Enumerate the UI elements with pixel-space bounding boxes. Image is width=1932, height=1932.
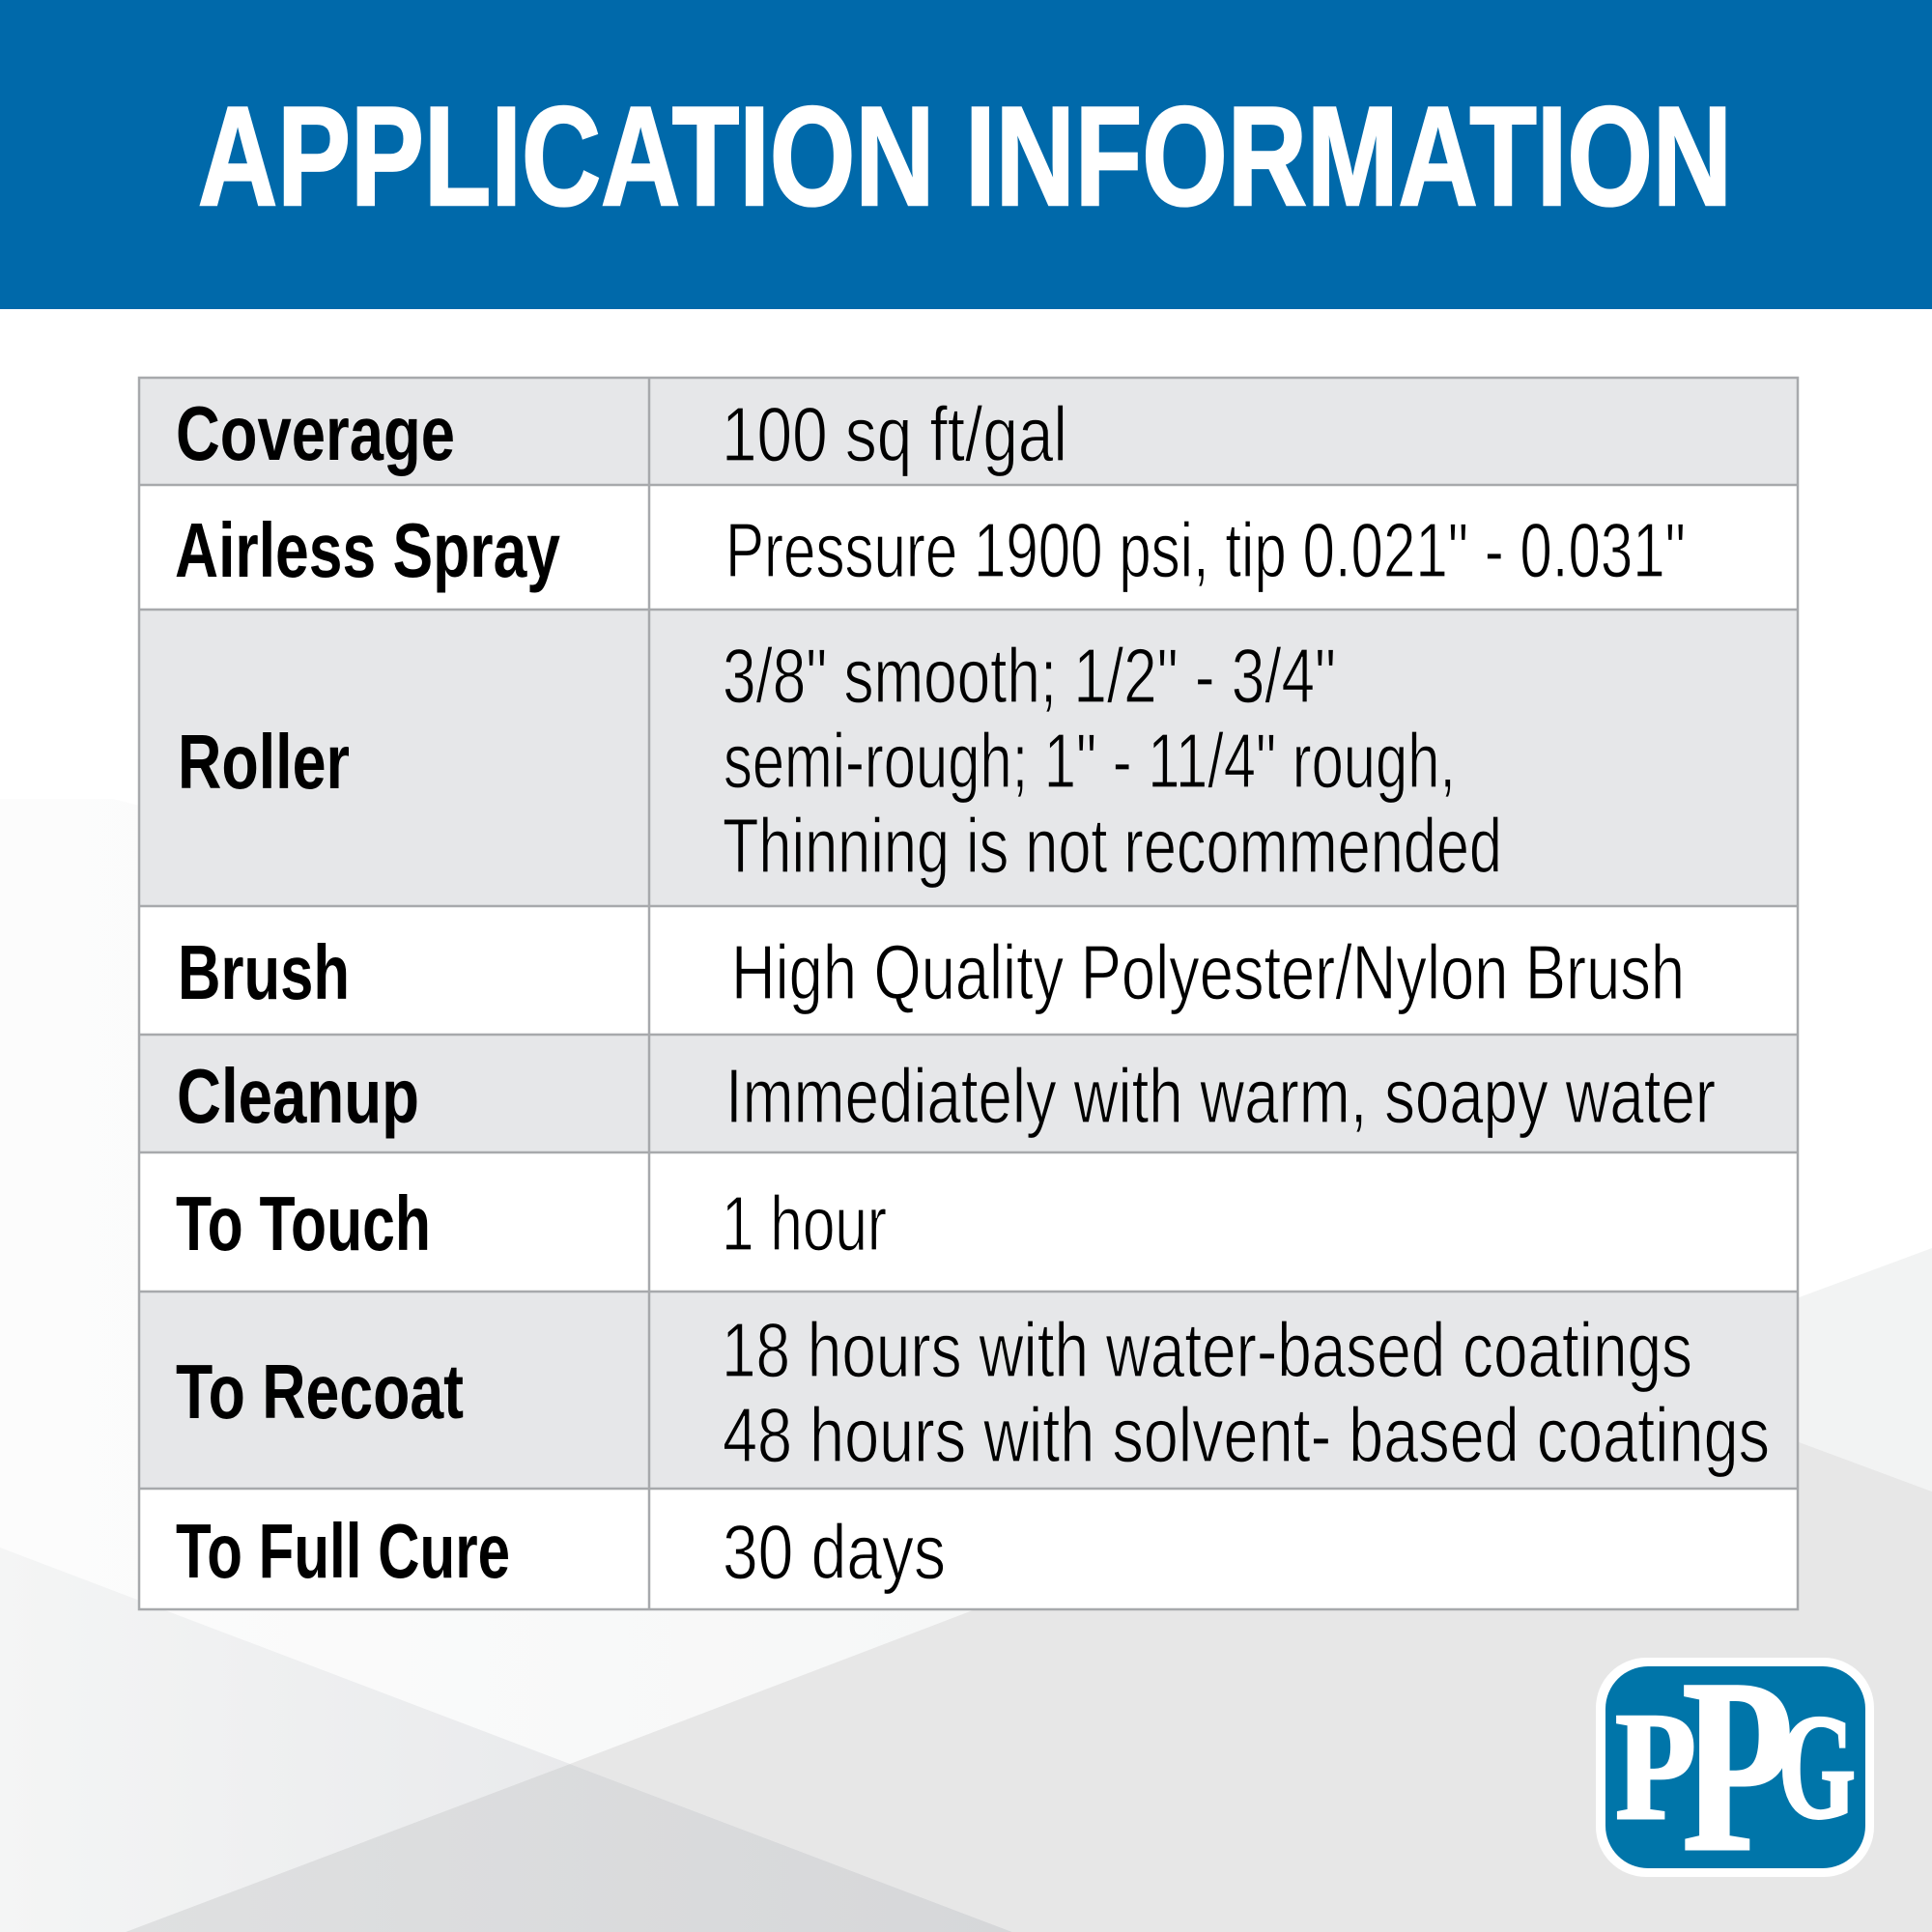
label: to full cure: To Full Cure — [176, 1508, 510, 1594]
value: to touch: 1 hour — [722, 1180, 887, 1266]
table — [139, 378, 1798, 1609]
row: to recoat — [139, 1292, 1798, 1489]
label: cleanup: Cleanup — [177, 1053, 419, 1139]
row: to full cure — [139, 1489, 1798, 1609]
value: roller: semi-rough; 1" - 11/4" rough, — [724, 718, 1456, 804]
logo: PPG: G — [1778, 1684, 1856, 1850]
value: roller: 3/8" smooth; 1/2" - 3/4" — [723, 633, 1336, 719]
row: roller — [139, 610, 1798, 906]
value: to full cure: 30 days — [723, 1509, 946, 1595]
logo: PPG: P — [1682, 1628, 1794, 1903]
label: coverage: Coverage — [176, 390, 455, 476]
value: brush: High Quality Polyester/Nylon Brush — [731, 929, 1685, 1015]
label: to recoat: To Recoat — [176, 1349, 464, 1435]
table grid lines — [139, 378, 1798, 1609]
value: coverage: 100 sq ft/gal — [722, 391, 1067, 477]
row: to touch — [139, 1152, 1798, 1292]
row: airless spray — [139, 485, 1798, 610]
value: roller: Thinning is not recommended — [723, 803, 1502, 889]
label: brush: Brush — [178, 929, 350, 1015]
logo: PPG — [1596, 1628, 1874, 1903]
row: coverage — [139, 378, 1798, 485]
row: brush — [139, 906, 1798, 1035]
label: roller: Roller — [178, 719, 350, 805]
logo: PPG: P — [1615, 1680, 1696, 1852]
row: cleanup — [139, 1035, 1798, 1152]
header banner — [0, 0, 1932, 309]
label: to touch: To Touch — [176, 1180, 431, 1266]
label: airless spray: Airless Spray — [175, 507, 560, 593]
value: to recoat: 18 hours with water-based coatings — [722, 1307, 1692, 1393]
value: roller — [723, 633, 1502, 889]
value: to recoat — [722, 1307, 1770, 1478]
